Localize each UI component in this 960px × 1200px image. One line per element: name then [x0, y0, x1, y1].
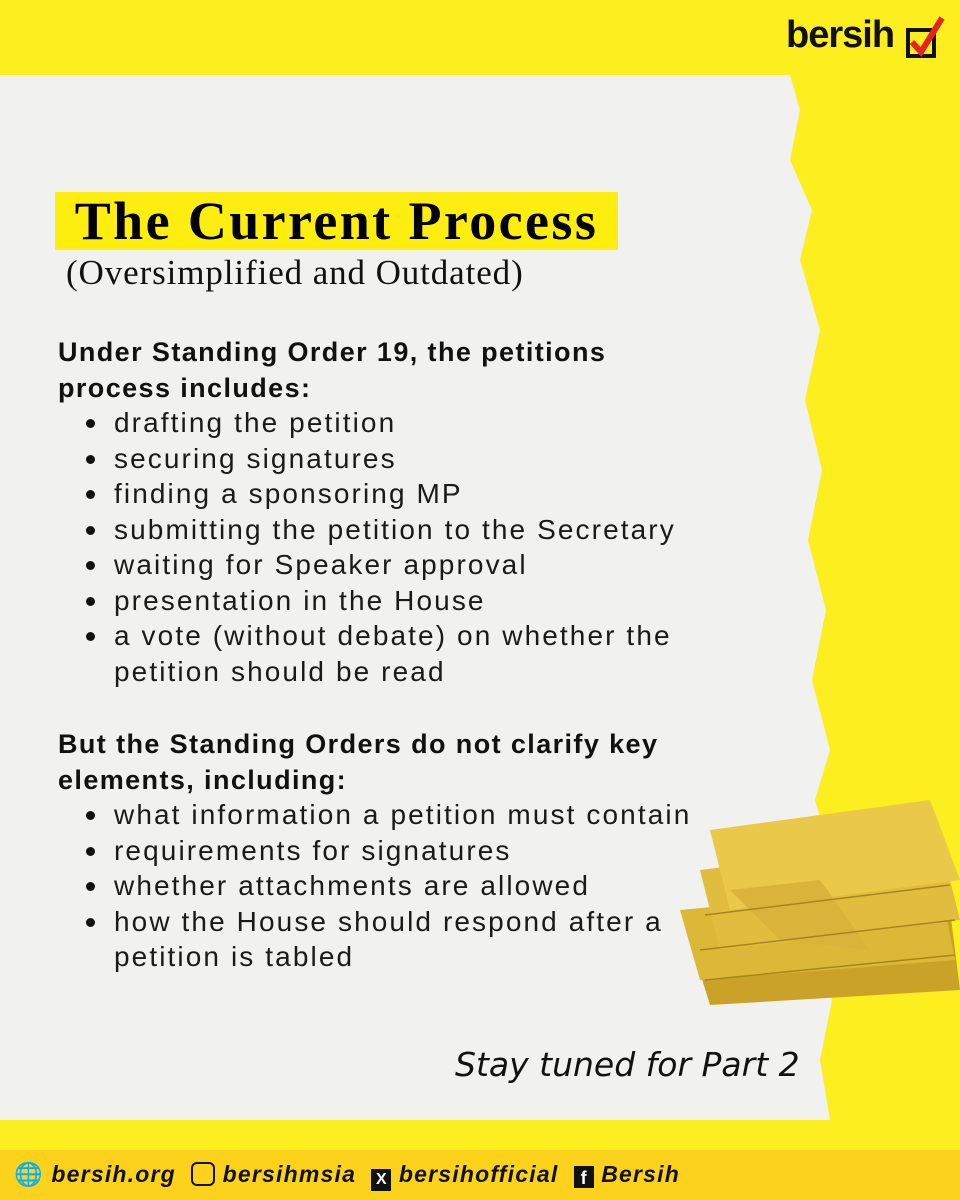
list 1: presentation in the House — [114, 584, 486, 616]
list 2 — [86, 799, 691, 972]
list 1: submitting the petition to the Secretary — [114, 514, 676, 544]
list 1: a vote (without debate) on whether the — [114, 620, 672, 651]
list 1: waiting for Speaker approval — [114, 549, 528, 580]
title: The Current Process — [75, 191, 598, 251]
logo — [786, 14, 944, 58]
list 2: what information a petition must contain — [114, 799, 691, 830]
list 2: petition is tabled — [114, 941, 354, 972]
footer socials: 🌐 bersih.org bersihmsia bersihofficial Bersih — [14, 1161, 680, 1187]
list 1 — [86, 407, 676, 687]
list 1: drafting the petition — [114, 407, 396, 438]
list 2: requirements for signatures — [114, 834, 512, 866]
heading 1: Under Standing Order 19, the petitions — [58, 337, 606, 367]
heading 2 — [58, 729, 658, 794]
paper panel — [0, 75, 836, 1120]
list 2: whether attachments are allowed — [114, 870, 590, 901]
logo: bersih — [786, 14, 894, 56]
list 1: finding a sponsoring MP — [114, 478, 463, 509]
stay tuned: Stay tuned for Part 2 — [455, 1045, 800, 1084]
heading 1 — [58, 337, 606, 402]
subtitle: (Oversimplified and Outdated) — [66, 253, 524, 292]
papers stack — [680, 800, 960, 1005]
heading 2: elements, including: — [58, 764, 347, 794]
footer socials: X — [376, 1171, 387, 1188]
heading 2: But the Standing Orders do not clarify key — [58, 729, 658, 759]
list 1: securing signatures — [114, 442, 397, 474]
list 1: petition should be read — [114, 656, 446, 686]
heading 1: process includes: — [58, 372, 311, 402]
list 2: how the House should respond after a — [114, 906, 663, 936]
footer socials: f — [581, 1168, 587, 1188]
